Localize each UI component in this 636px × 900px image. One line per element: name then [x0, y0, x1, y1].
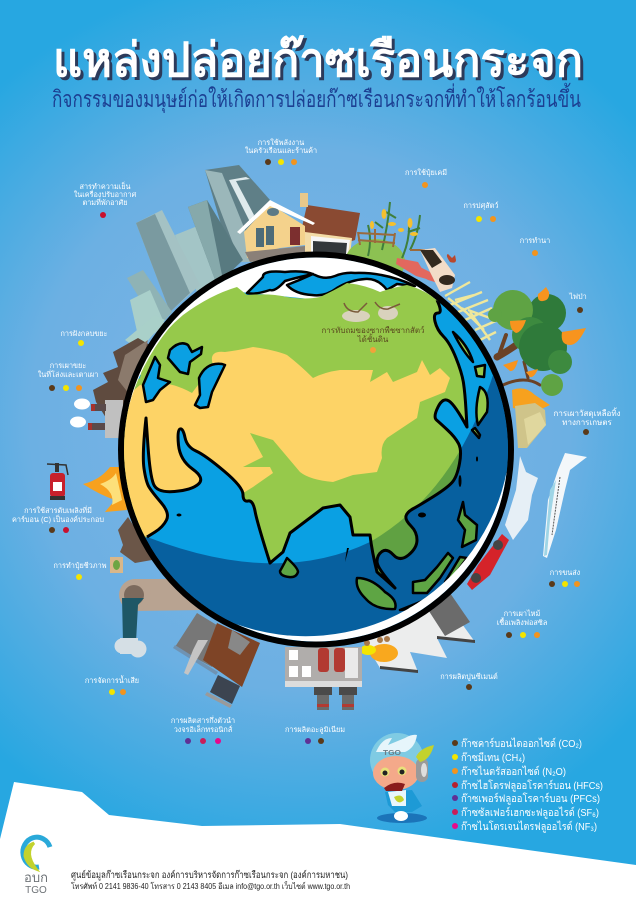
label: forest fire: ไฟป่า	[568, 292, 587, 301]
land yellow	[124, 347, 459, 574]
label: decomposition: ได้ชั้นดิน	[357, 333, 389, 344]
white limb	[128, 281, 224, 410]
legend	[452, 737, 603, 833]
label: extinguishers: คาร์บอน (C) เป็นองค์ประกอบ	[12, 514, 104, 524]
label: rice: การทำนา	[520, 236, 550, 245]
illustration: fire extinguisher	[47, 463, 68, 500]
label: cement: การผลิตปูนซีเมนต์	[440, 672, 498, 681]
small islets	[176, 456, 478, 562]
legend: ก๊าซมีเทน (CH₄)	[461, 751, 525, 764]
label: semiconductors: วงจรอิเล็กทรอนิกส์	[174, 724, 233, 734]
illustration: airplane	[543, 453, 587, 558]
label: decomposition: การทับถมของซากพืชซากสัตว์	[321, 325, 425, 335]
label: household energy: ในครัวเรือนและร้านค้า	[245, 146, 317, 155]
legend: ก๊าซเพอร์ฟลูออโรคาร์บอน (PFCs)	[461, 792, 600, 805]
footer text	[71, 869, 350, 891]
label: aluminium: การผลิตอะลูมิเนียม	[285, 725, 345, 734]
label: semiconductors: การผลิตสารกึ่งตัวนำ	[171, 715, 235, 725]
label: agricultural burning: การเผาวัสดุเหลือทิ้ง	[553, 407, 621, 418]
illustration: compost bag	[110, 557, 123, 573]
logo: TGO	[25, 885, 47, 896]
legend: ก๊าซไนโตรเจนไตรฟลูออไรด์ (NF₃)	[461, 820, 597, 833]
illustration: wastewater pipe	[114, 579, 205, 658]
logo: อบก	[24, 870, 48, 885]
label: aluminium	[285, 725, 345, 744]
land green	[110, 283, 467, 588]
label: livestock	[464, 201, 498, 222]
footer text: ศูนย์ข้อมูลก๊าซเรือนกระจก องค์การบริหารจัดการก๊าซเรือนกระจก (องค์การมหาชน)	[71, 869, 348, 881]
animal skulls	[342, 302, 400, 322]
label: fossil fuel	[497, 609, 547, 638]
illustration: fire	[83, 467, 127, 512]
illustration: electronics factory	[173, 613, 260, 708]
label: landfill	[61, 329, 108, 346]
label: extinguishers: การใช้สารดับเพลิงที่มี	[24, 505, 92, 515]
label: fossil fuel: เชื้อเพลิงฟอสซิล	[497, 617, 547, 627]
illustration: ship	[505, 456, 538, 540]
arctic sea	[247, 271, 415, 295]
title: แหล่งปล่อยก๊าซเรือนกระจก	[53, 33, 583, 86]
label: waste burning	[38, 361, 98, 391]
label: landfill: การฝังกลบขยะ	[61, 329, 108, 338]
illustration: burning hay	[512, 388, 550, 448]
ocean	[124, 258, 508, 642]
label: household energy: การใช้พลังงาน	[258, 138, 304, 147]
label: compost: การทำปุ๋ยชีวภาพ	[53, 561, 107, 570]
label: forest fire	[568, 292, 587, 313]
label: transport: การขนส่ง	[550, 568, 581, 577]
legend: ก๊าซไฮโดรฟลูออโรคาร์บอน (HFCs)	[461, 779, 603, 792]
illustration: house	[237, 193, 360, 262]
label: wastewater	[85, 675, 139, 695]
footer white panel	[0, 782, 636, 900]
label: decomposition	[321, 325, 425, 353]
label: livestock: การปศุสัตว์	[464, 201, 498, 210]
title: แหล่งปล่อยก๊าซเรือนกระจก	[56, 36, 586, 89]
illustration: landfill	[93, 338, 150, 460]
legend: ก๊าซไนตรัสออกไซด์ (N₂O)	[461, 765, 566, 778]
illustration: cement plant	[360, 593, 475, 673]
label: cement	[440, 672, 498, 690]
label: transport	[549, 568, 581, 587]
deep ocean	[144, 375, 508, 642]
illustration: skyscrapers	[125, 165, 270, 350]
label: refrigerants: ตามที่พักอาศัย	[82, 197, 128, 207]
label: fertilizer: การใช้ปุ๋ยเคมี	[405, 168, 447, 177]
label: agricultural burning	[553, 407, 621, 435]
label: agricultural burning: ทางการเกษตร	[562, 418, 613, 427]
coastline	[143, 300, 467, 588]
label: compost	[53, 561, 107, 580]
label: waste burning: การเผาขยะ	[50, 361, 86, 370]
illustration: aluminium smelter	[285, 647, 362, 710]
label: fertilizer	[405, 168, 447, 188]
globe	[118, 252, 514, 648]
illustration: rice stalks	[445, 282, 498, 340]
illustration: livestock	[396, 248, 456, 292]
footer text: โทรศัพท์ 0 2141 9836-40 โทรสาร 0 2143 8405 อีเมล info@tgo.or.th เว็บไซต์ www.tgo.or.th	[71, 881, 350, 891]
label: refrigerants	[74, 181, 137, 218]
label: refrigerants: สารทำความเย็น	[79, 181, 131, 191]
label: semiconductors	[171, 715, 235, 744]
label: fossil fuel: การเผาไหม้	[504, 609, 540, 618]
illustration: car	[467, 534, 509, 590]
white crescent	[236, 470, 507, 642]
mascot: TGO	[383, 750, 402, 757]
label: refrigerants: ในเครื่องปรับอากาศ	[74, 189, 137, 199]
label: rice	[520, 236, 550, 256]
polar ice cap	[138, 258, 438, 376]
label: household energy	[245, 138, 317, 165]
mascot	[370, 733, 434, 823]
illustration: corn farm	[345, 202, 425, 285]
legend: ก๊าซคาร์บอนไดออกไซด์ (CO₂)	[461, 737, 582, 750]
legend: ก๊าซซัลเฟอร์เฮกซะฟลูออไรด์ (SF₆)	[461, 806, 599, 819]
logo	[23, 837, 50, 896]
east asian islands	[280, 332, 488, 610]
label: wastewater: การจัดการน้ำเสีย	[85, 675, 139, 685]
illustration: smoking factory	[70, 398, 123, 438]
label: waste burning: ในที่โล่งและเตาเผา	[38, 369, 98, 379]
illustration: burning tree	[488, 287, 586, 396]
black sea and caspian	[143, 343, 225, 408]
label: extinguishers	[12, 505, 104, 533]
illustration: lower dump	[118, 517, 152, 563]
